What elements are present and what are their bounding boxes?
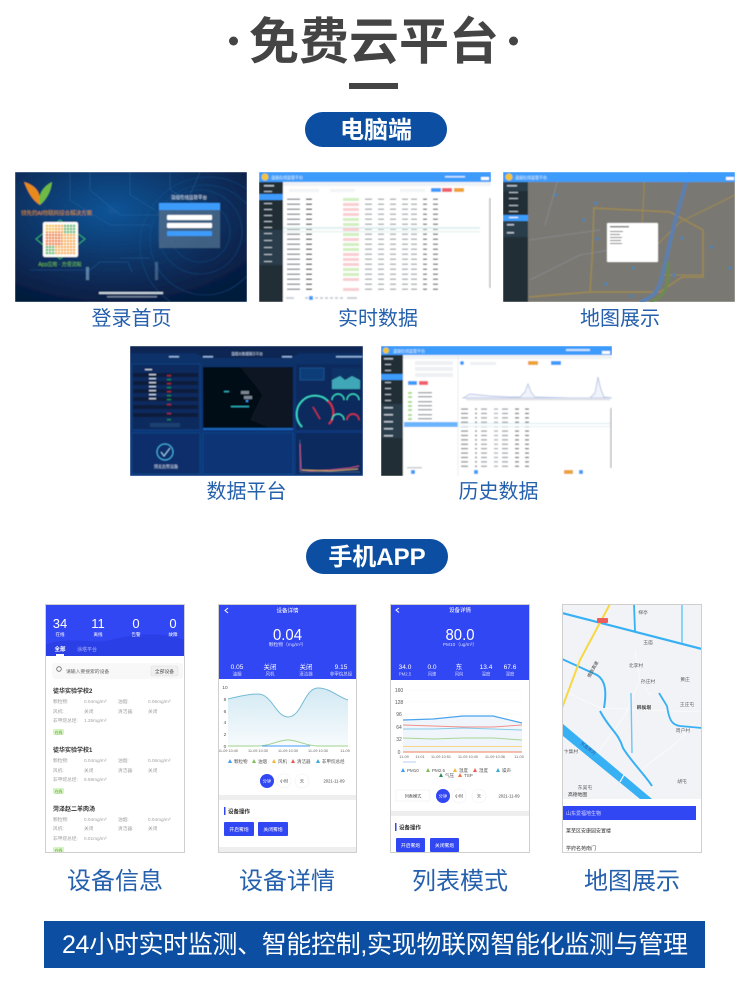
tagline: 领先的AI物联网综合解决方案 [21, 209, 93, 217]
detail header: 关闭 [264, 662, 276, 671]
detail legend: 油烟 [258, 758, 267, 765]
device card 3: 菏泽赵二羊肉汤 [53, 805, 95, 813]
device card 3: 关闭 [148, 825, 158, 832]
title underline [349, 83, 398, 89]
detail header [225, 606, 353, 678]
label: 登录首页: 登录首页 [92, 307, 172, 330]
bottom banner: 24小时实时监测、智能控制,实现物联网智能化监测与管理 [62, 931, 688, 959]
label: 地图展示: 地图展示 [580, 307, 660, 330]
device card 2: 0.04mg/m³ [84, 758, 107, 763]
detail operations: 设备操作 [228, 808, 251, 816]
list mode legend: TSP [464, 773, 473, 778]
icon: QR code [43, 222, 78, 257]
list mode header: 风向 [455, 670, 463, 678]
device card 3 [53, 805, 171, 853]
list mode legend: 噪声 [502, 767, 511, 774]
site list [563, 806, 696, 852]
detail header: 9.15 [335, 664, 348, 671]
search box [56, 666, 178, 676]
list mode line chart: 11-09 [399, 755, 409, 759]
history toolbar [528, 361, 538, 365]
list mode header: 湿度 [506, 670, 515, 678]
device card 3: 关闭 [84, 825, 94, 832]
device card 1: 0.04mg/m³ [84, 699, 107, 704]
list mode legend: 气压 [445, 772, 454, 779]
login box: 温烟在线监管平台 [171, 194, 207, 201]
section pill: 手机APP: 手机APP [328, 544, 426, 571]
list mode header: 80.0 [446, 627, 475, 644]
list mode line chart: 11-09 [514, 755, 524, 759]
list mode time buttons: 分钟 [439, 792, 447, 800]
device card 2: 徒华实验学校1 [53, 746, 93, 754]
phone map area: 黄庄 [680, 676, 690, 683]
device card 1 [53, 687, 171, 735]
label: 地图展示: 地图展示 [584, 868, 680, 895]
device card 2: 9.59mg/m³ [84, 777, 107, 782]
detail header: 油烟 [232, 670, 242, 678]
list mode line chart: 11-09 10:51 [431, 755, 451, 759]
label: 列表模式: 列表模式 [412, 868, 508, 895]
data table [259, 197, 491, 292]
map roads [529, 172, 735, 302]
stats row: 故障 [168, 631, 178, 638]
warning device panel: 预无告警设备 [154, 463, 178, 469]
label: 实时数据: 实时数据 [338, 307, 418, 330]
list mode operations: 关闭雾炮 [435, 842, 454, 849]
panel: phone device info [45, 604, 185, 853]
list mode header [396, 606, 517, 678]
detail legend [228, 758, 345, 765]
list mode header: PM10（ug/m³） [443, 642, 477, 648]
list mode operations: 开启雾炮 [401, 842, 420, 849]
device card 3: 0.01mg/m³ [84, 836, 107, 841]
phone map area [562, 604, 702, 799]
detail time buttons: 分钟 [263, 778, 271, 784]
panel: login screenshot [15, 172, 247, 302]
phone map area: 王庄屯 [680, 701, 694, 708]
panel: map screenshot [503, 172, 735, 302]
stats row: 0 [169, 616, 177, 631]
panel: history data screenshot: 温烟在线监管平台 [393, 348, 425, 354]
list mode header: 34.0 [399, 664, 412, 671]
list mode line chart: 11-09 10:40 [458, 755, 478, 759]
icon: logo [24, 182, 40, 205]
panel: realtime data screenshot [259, 172, 491, 302]
detail line chart: 11-09 10:30 [278, 749, 298, 753]
site list: 莱芜区安康园安置楼 [566, 828, 611, 834]
detail header: 非甲烷总烃 [330, 670, 353, 678]
device card 3: 在线 [55, 848, 62, 853]
device card 2: 非甲烷总烃: [53, 776, 78, 783]
detail header: 风机 [266, 670, 275, 678]
list mode header: 67.6 [504, 664, 517, 671]
device card 1: 清洁器: [118, 708, 133, 715]
list mode line chart: 96 [396, 712, 402, 718]
panel: phone list mode [390, 604, 530, 853]
list mode line chart: 11:01 [415, 755, 425, 759]
device card 1: 关闭 [84, 708, 94, 715]
list mode header: 温度 [482, 670, 491, 678]
detail line chart: 0 [224, 744, 227, 750]
detail line chart: 11-09 10:30 [248, 749, 268, 753]
device card 2: 0.06mg/m³ [148, 758, 171, 763]
stats row [53, 616, 178, 656]
detail time buttons: 天 [300, 778, 305, 784]
panel: map screenshot: 温烟在线监管平台 [515, 174, 547, 180]
device card 3: 0.04mg/m³ [148, 817, 171, 822]
device card 1: 徒华实验学校2 [53, 687, 93, 695]
search box: 全部设备 [155, 668, 174, 675]
icon: diamond frame [36, 220, 85, 259]
detail time buttons: 2021-11-09 [323, 778, 345, 784]
bottom banner [44, 921, 705, 968]
device card 1: 风机: [53, 708, 64, 715]
device card 2: 清洁器: [118, 767, 133, 774]
detail header: 颗粒物（mg/m³） [269, 641, 306, 648]
panel: realtime data screenshot: 温烟在线监管平台 [271, 174, 303, 180]
history pagination [474, 470, 478, 474]
stats row: 告警 [132, 631, 141, 638]
device card 1: 关闭 [148, 708, 158, 715]
list mode time buttons: 小时 [455, 792, 464, 800]
list mode time buttons: 列表模式 [405, 792, 422, 800]
device card 3: 非甲烷总烃: [53, 835, 78, 842]
device table panel [132, 364, 200, 430]
detail legend: 风机 [278, 758, 287, 765]
map popup [607, 223, 658, 262]
detail line chart: 11-09 [340, 749, 350, 753]
list mode legend: 湿度 [479, 767, 488, 774]
stats row: 0 [132, 616, 140, 631]
device card 3: 风机: [53, 825, 64, 832]
panel: data platform screenshot: 温烟大数据展示平台 [231, 351, 263, 356]
device card 2: 关闭 [148, 767, 158, 774]
toolbar buttons [431, 188, 441, 192]
phone map area: 北李村 [629, 662, 643, 669]
section pill: 手机APP [306, 539, 448, 574]
label: 历史数据: 历史数据 [458, 480, 538, 503]
phone map area: 胡屯 [677, 778, 687, 785]
stats row: 离线 [94, 631, 103, 638]
detail legend: 颗粒物 [234, 758, 248, 765]
device card 1: 颗粒物: [53, 698, 68, 705]
list mode line chart: 64 [396, 725, 402, 731]
section pill: 电脑端: 电脑端 [340, 117, 412, 144]
world map panel [203, 367, 293, 430]
phone map area: 韩侯垠 [637, 704, 651, 711]
road badge [597, 618, 608, 623]
detail line chart: 11-09 10:30 [308, 749, 328, 753]
list mode legend: PM2.5 [432, 768, 446, 773]
device card 2 [53, 746, 171, 794]
search box: 请输入要搜索的设备 [66, 668, 109, 675]
list mode line chart: 11-09 10:36 [485, 755, 505, 759]
phone map area: 孙庄村 [641, 678, 655, 685]
list mode operations: 设备操作 [399, 824, 422, 832]
stats row: 34 [53, 616, 67, 631]
list mode header: 东 [456, 662, 463, 671]
history left list [403, 355, 612, 474]
device card 3: 颗粒物: [53, 816, 68, 823]
phone map area: 梯亭 [638, 609, 648, 616]
list mode header: 风速 [428, 672, 437, 678]
list mode time buttons: 天 [477, 794, 482, 800]
device card 2: 关闭 [84, 767, 94, 774]
list mode header: 13.4 [480, 664, 493, 671]
detail header: 关闭 [300, 662, 312, 671]
stats row: 全部 [54, 645, 66, 653]
label: 数据平台: 数据平台 [206, 480, 286, 503]
detail line chart: 4 [224, 720, 227, 726]
panel: phone map [562, 604, 702, 853]
panel: data platform screenshot [130, 346, 363, 476]
device card 3: 清洁器: [118, 825, 133, 832]
detail legend: 清洁器 [297, 758, 311, 765]
gauge panel [296, 364, 362, 430]
phone map area: 东吴屯 [578, 784, 592, 791]
list mode line chart: 160 [395, 688, 403, 694]
phone map area: 德商高速 [586, 659, 600, 679]
list mode legend: 温度 [459, 767, 468, 774]
pagination [286, 297, 357, 299]
list mode header: PM2.5 [399, 672, 412, 676]
detail operations [224, 807, 288, 836]
site list: 山东爱福地生物 [566, 810, 601, 817]
label: 设备详情: 设备详情 [239, 868, 335, 895]
list mode time buttons [396, 789, 520, 803]
history table [460, 407, 610, 469]
footer text [99, 292, 163, 298]
device card 1: 0.06mg/m³ [148, 699, 171, 704]
device card 1: 在线 [55, 730, 62, 735]
section pill: 电脑端 [305, 112, 447, 147]
device card 1: 1.25mg/m³ [84, 718, 107, 723]
trend panel [296, 433, 362, 474]
phone map area: 东鱼新河 [579, 740, 598, 757]
panel: phone device detail [218, 604, 357, 853]
warning device panel [132, 433, 200, 474]
detail header: 0.04 [273, 627, 302, 644]
detail line chart: 10 [222, 685, 228, 691]
list mode line chart: 128 [395, 700, 403, 706]
detail line chart: 11-09 10:40 [218, 749, 238, 753]
list mode line chart [395, 688, 524, 763]
label: 设备信息: 设备信息 [67, 868, 163, 895]
phone map area: 卞集村 [564, 748, 578, 755]
phone map area: 高德地图 [568, 791, 587, 798]
phone map area: 周户村 [676, 727, 690, 734]
detail line chart: 6 [224, 709, 227, 715]
detail time buttons [260, 774, 345, 788]
device card 2: 在线 [55, 789, 62, 794]
detail line chart [218, 685, 350, 753]
detail line chart: 8 [224, 697, 227, 703]
list mode legend: PM10 [407, 768, 419, 773]
list mode legend [401, 767, 511, 779]
detail header: 设备详情 [276, 606, 299, 614]
detail header: 清洁器 [299, 670, 313, 678]
device card 1: 油烟: [118, 698, 129, 705]
stats row: 在线 [56, 631, 65, 637]
list mode header: 0.0 [427, 664, 437, 671]
login box [159, 194, 220, 248]
stats row: 涂塔平台 [77, 646, 97, 653]
detail operations: 开启雾炮 [229, 826, 249, 833]
list mode line chart: 0 [398, 750, 401, 756]
stats row: 11 [91, 616, 105, 631]
site list: 学府名苑南门 [566, 845, 596, 852]
detail legend: 非甲烷总烃 [322, 758, 345, 765]
list mode time buttons: 2021-11-09 [498, 794, 520, 798]
panel: history data screenshot [381, 346, 612, 476]
detail operations: 关闭雾炮 [263, 826, 283, 833]
phone map area: 玉庙 [643, 639, 653, 646]
device card 3: 0.04mg/m³ [84, 817, 107, 822]
list mode header: 设备详情 [449, 606, 471, 614]
device card 2: 油烟: [118, 757, 129, 764]
list mode line chart: 32 [396, 737, 402, 743]
detail line chart: 2 [224, 732, 227, 738]
detail time buttons: 小时 [280, 778, 289, 784]
QR caption: App应用 · 方便流転 [38, 261, 82, 268]
center bottom panel [203, 433, 293, 474]
device card 2: 风机: [53, 767, 64, 774]
device card 1: 非甲烷总烃: [53, 717, 78, 724]
device card 2: 颗粒物: [53, 757, 68, 764]
history line chart [463, 377, 612, 400]
detail header: 0.05 [231, 664, 244, 671]
title: 免费云平台 [249, 14, 499, 70]
device card 3: 油烟: [118, 816, 129, 823]
list mode operations [395, 823, 459, 852]
